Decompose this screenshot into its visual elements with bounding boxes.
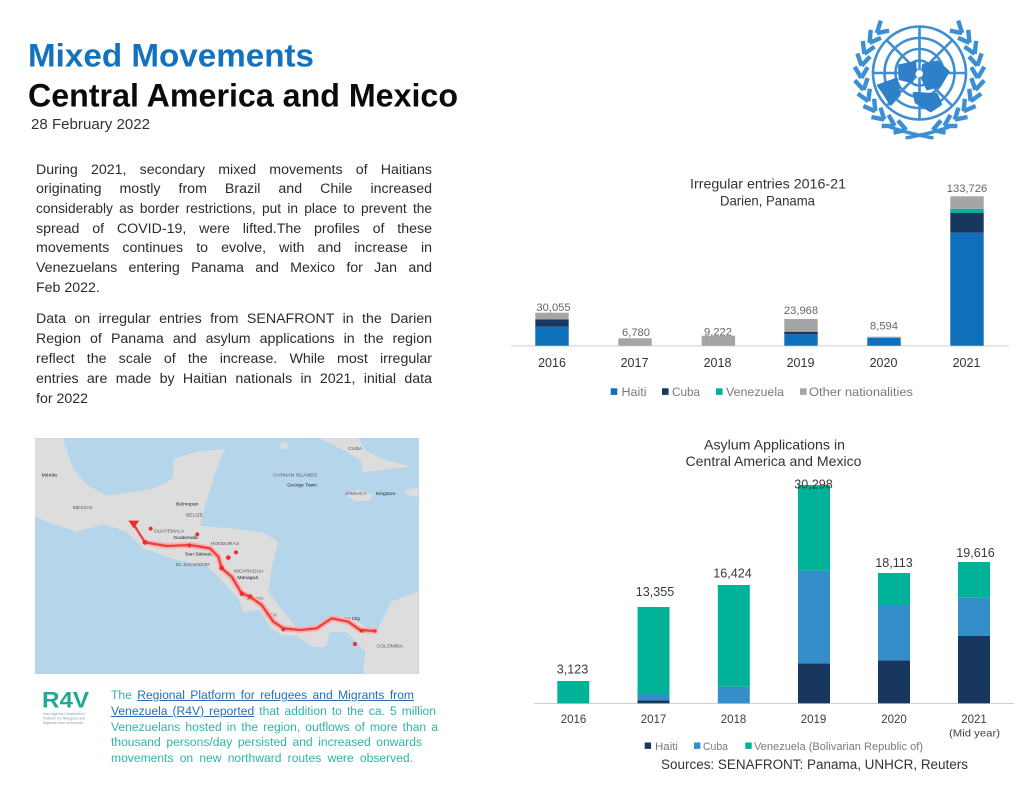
legend: Haiti: [655, 741, 678, 753]
map: [35, 438, 419, 674]
text block: paragraph 2: entries are made by Haitian nationals in 2021, initial data: [36, 371, 432, 387]
map labels: Kingston: [376, 491, 396, 497]
land: Cuba: [319, 438, 412, 472]
icon: UN emblem: [854, 21, 985, 138]
stacked bars: [535, 196, 984, 346]
axis labels: 2017: [641, 714, 666, 726]
text block: paragraph 2: [36, 311, 432, 407]
text block: paragraph 1: movements continues to evolve, with and increase in: [36, 240, 432, 256]
text block: paragraph 1: spread of COVID-19, were lifted.The profiles of these: [36, 220, 432, 236]
date: 28 February 2022: [31, 117, 150, 133]
value labels: 3,123: [557, 662, 588, 676]
text block: R4V note: Venezuela (R4V) reported that addition to the ca. 5 million: [111, 704, 436, 718]
title: Central America and Mexico: [28, 78, 458, 114]
axis labels: 2016: [561, 714, 586, 726]
title: Mixed Movements: [28, 38, 314, 74]
map labels: EL SALVADOR: [176, 562, 210, 568]
axis labels: 2020: [881, 714, 907, 726]
chart title: [690, 176, 846, 208]
land: Mexico, Central America, Colombia: [35, 438, 418, 674]
map labels: GUATEMALA: [154, 528, 185, 534]
axis labels: 2020: [870, 356, 897, 370]
value labels: 6,780: [622, 327, 650, 339]
logo: R4V: R4V: [42, 688, 89, 712]
axis labels: 2016: [538, 356, 566, 370]
chart title: [686, 438, 862, 469]
axis labels: 2019: [801, 714, 826, 726]
chart: irregular entries: [511, 176, 1009, 399]
value labels: 18,113: [875, 556, 913, 570]
map labels: COLOMBIA: [377, 643, 404, 649]
axis labels: 2017: [621, 356, 648, 370]
chart title: Asylum Applications in: [704, 438, 845, 452]
value labels: 9,222: [704, 326, 732, 338]
text block: paragraph 1: During 2021, secondary mixed movements of Haitians: [36, 162, 432, 178]
axis: [511, 345, 1009, 347]
map labels: Belmopan: [176, 502, 199, 508]
text block: paragraph 2: Data on irregular entries from SENAFRONT in the Darien: [36, 311, 432, 327]
text block: paragraph 2: for 2022: [36, 391, 88, 407]
text block: paragraph 1: originating mostly from Brazil and Chile increased: [36, 181, 432, 197]
logo: R4V: Inter-Agency Coordination: [43, 712, 85, 716]
legend: Haiti: [622, 385, 646, 399]
logo: R4V: Platform for Refugees and: [43, 716, 85, 720]
axis labels: 2019: [787, 356, 814, 370]
map labels: [42, 446, 404, 649]
logo: R4V: [42, 688, 89, 725]
axis labels: 2018: [704, 356, 731, 370]
route: [134, 525, 375, 631]
text block: R4V note: movements on new northward routes were observed.: [111, 751, 413, 765]
text block: R4V note: Venezuelans hosted in the region, outflows of more than a: [111, 720, 438, 734]
chart: asylum applications: [534, 438, 1014, 753]
axis labels: [561, 714, 1000, 740]
value labels: 23,968: [784, 305, 818, 317]
value labels: 30,298: [794, 478, 833, 492]
value labels: 8,594: [870, 320, 898, 332]
chart title: Darien, Panama: [720, 194, 815, 208]
map labels: Managua: [237, 575, 258, 581]
axis labels: 2021: [953, 356, 980, 370]
chart title: Irregular entries 2016-21: [690, 176, 846, 192]
chart title: Central America and Mexico: [686, 454, 862, 469]
value labels: 30,055: [536, 302, 571, 314]
legend: Cuba: [703, 741, 729, 753]
map labels: BELIZE: [186, 513, 204, 519]
text block: paragraph 1: Venezuelans entering Panama and Mexico for Jan and: [36, 260, 432, 276]
legend: Venezuela (Bolivarian Republic of): [754, 741, 923, 753]
axis labels: [538, 356, 980, 370]
legend: Other nationalities: [809, 385, 913, 399]
text block: paragraph 2: Region of Panama and asylum applications in the region: [36, 331, 432, 347]
logo: R4V: Migrants from Venezuela: [43, 721, 83, 725]
text block: paragraph 1: considerably as border restrictions, put in place to prevent the: [36, 201, 432, 216]
map labels: JAMAICA: [345, 491, 367, 497]
value labels: 133,726: [947, 183, 987, 195]
axis labels: (Mid year): [949, 728, 1000, 740]
route head and points: [128, 521, 377, 646]
value labels: [536, 183, 987, 339]
map labels: Mérida: [42, 472, 57, 478]
legend: Venezuela: [726, 385, 784, 399]
text block: R4V note: The Regional Platform for refugees and Migrants from: [111, 688, 414, 702]
legend: [645, 741, 923, 753]
map labels: CUBA: [348, 446, 363, 452]
legend: [611, 385, 913, 399]
stacked bars: [557, 485, 990, 703]
title: [28, 38, 458, 114]
value labels: 16,424: [713, 566, 752, 580]
legend: Cuba: [672, 385, 700, 399]
map labels: CAYMAN ISLANDS: [273, 473, 318, 479]
map labels: Guatemala: [173, 535, 198, 541]
value labels: 19,616: [956, 546, 995, 560]
axis labels: 2018: [721, 714, 746, 726]
value labels: [557, 478, 995, 676]
map labels: COSTA: [247, 596, 264, 602]
text block: R4V note: thousand persons/day persisted and increased onwards: [111, 735, 422, 749]
sources: Sources: SENAFRONT: Panama, UNHCR, Reuters: [661, 757, 968, 772]
map labels: HONDURAS: [211, 541, 240, 547]
map labels: MEXICO: [73, 505, 92, 511]
map labels: San Salvador: [185, 552, 215, 558]
map labels: George Town: [287, 483, 317, 489]
axis: [534, 702, 1014, 704]
text block: R4V note: [111, 688, 438, 765]
map labels: NICARAGUA: [234, 568, 264, 574]
map labels: RICA: [265, 613, 278, 619]
text block: paragraph 2: reflect the scale of the increase. While most irregular: [36, 351, 432, 367]
land: Jamaica and Hispaniola: [280, 442, 418, 501]
axis labels: 2021: [961, 714, 987, 726]
text block: paragraph 1: Feb 2022.: [36, 280, 100, 296]
map labels: Panama City: [332, 616, 361, 622]
value labels: 13,355: [636, 585, 674, 599]
text block: paragraph 1: [36, 162, 432, 296]
